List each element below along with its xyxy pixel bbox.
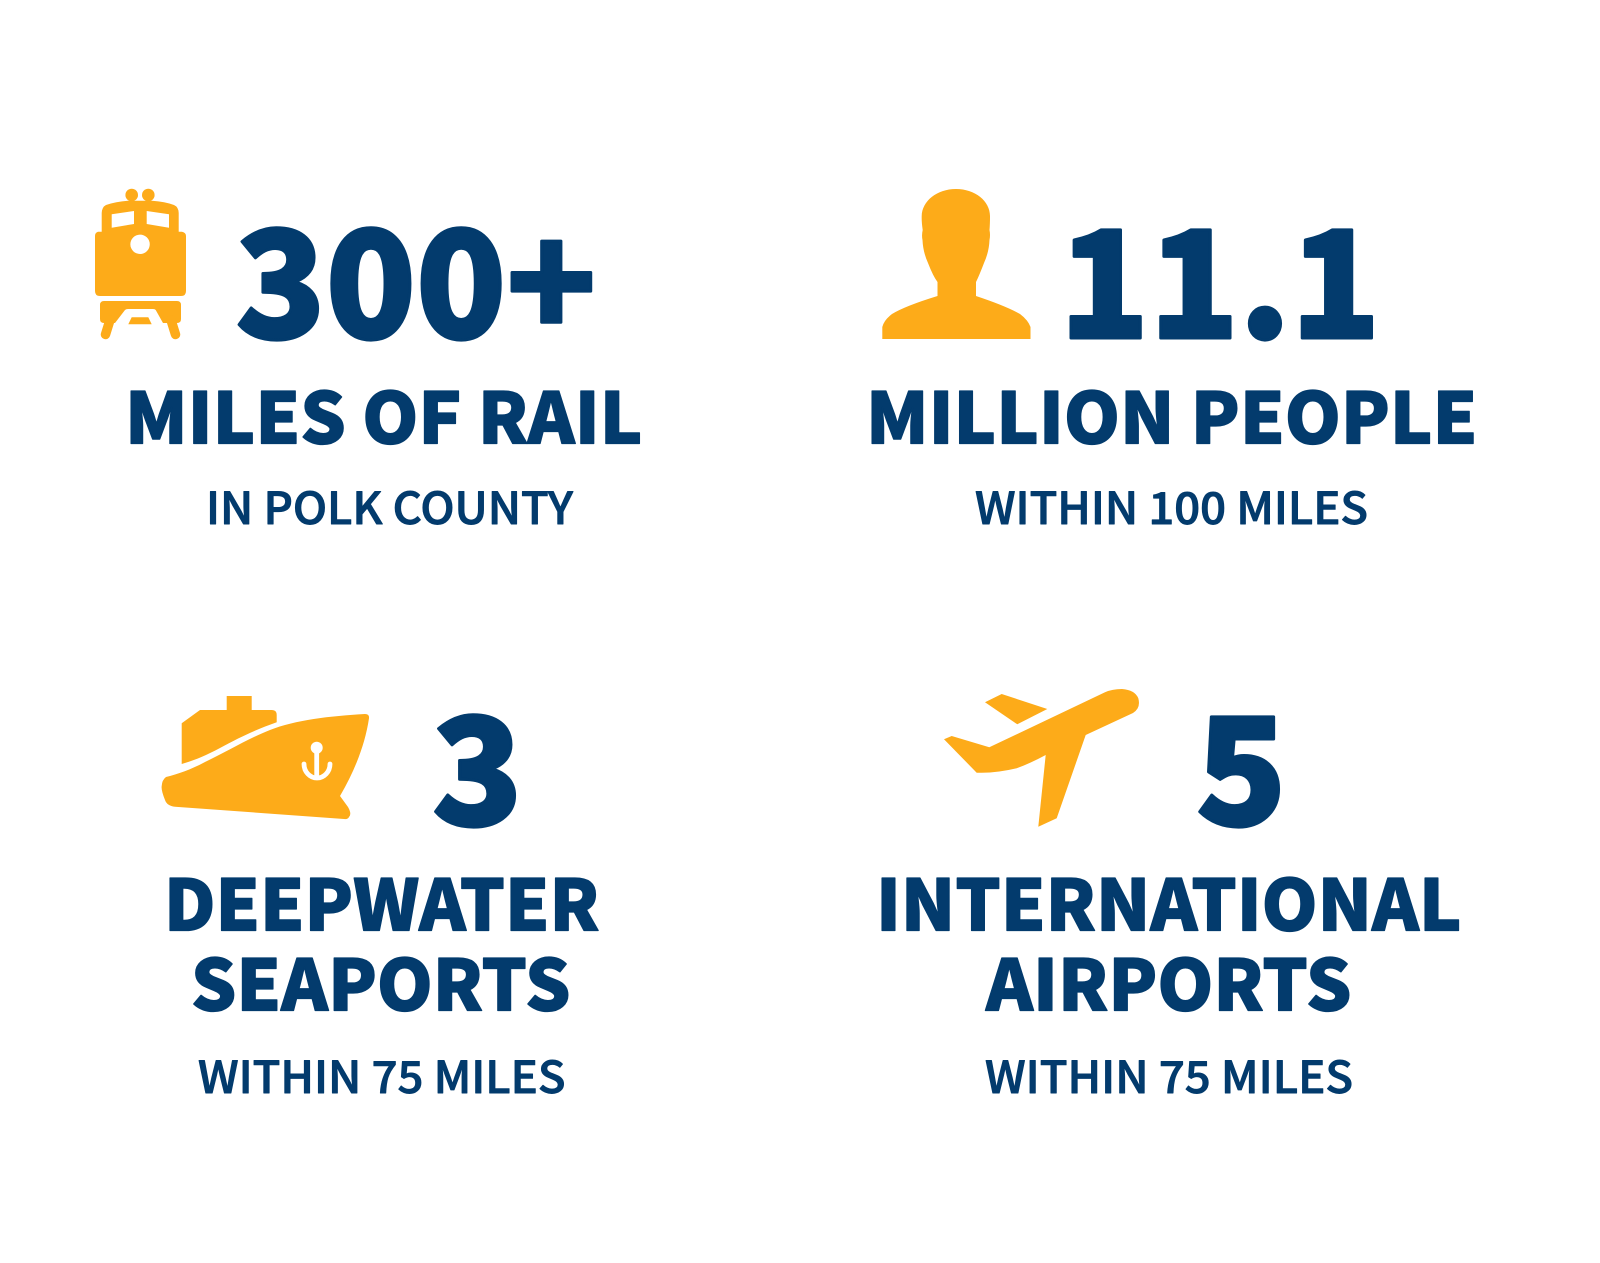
icon: airplane [944,689,1139,827]
panel: airports [876,652,1462,1106]
number: 300+: 300+ [236,165,596,381]
heading: airports: AIRPORTS [985,930,1352,1032]
subheading: within 75 miles: WITHIN 75 MILES [198,1042,566,1106]
heading: million people: MILLION PEOPLE [866,362,1478,464]
subheading: in polk county: IN POLK COUNTY [206,473,574,537]
number: 11.1: 11.1 [1060,165,1380,381]
subheading: within 75 miles: WITHIN 75 MILES [985,1042,1353,1106]
icon: person [882,189,1030,339]
number: 3: 3 [432,652,523,868]
heading: deepwater: DEEPWATER [164,850,600,952]
heading: seaports: SEAPORTS [191,930,570,1032]
subheading: within 100 miles: WITHIN 100 MILES [975,473,1368,537]
icon: train [95,189,186,334]
heading: international: INTERNATIONAL [876,850,1462,952]
number: 5: 5 [1196,652,1287,868]
panel: population [866,165,1478,537]
heading: miles of rail: MILES OF RAIL [125,362,642,464]
panel: seaports [162,652,599,1106]
panel: rail [95,165,642,537]
icon: ship [162,696,369,819]
